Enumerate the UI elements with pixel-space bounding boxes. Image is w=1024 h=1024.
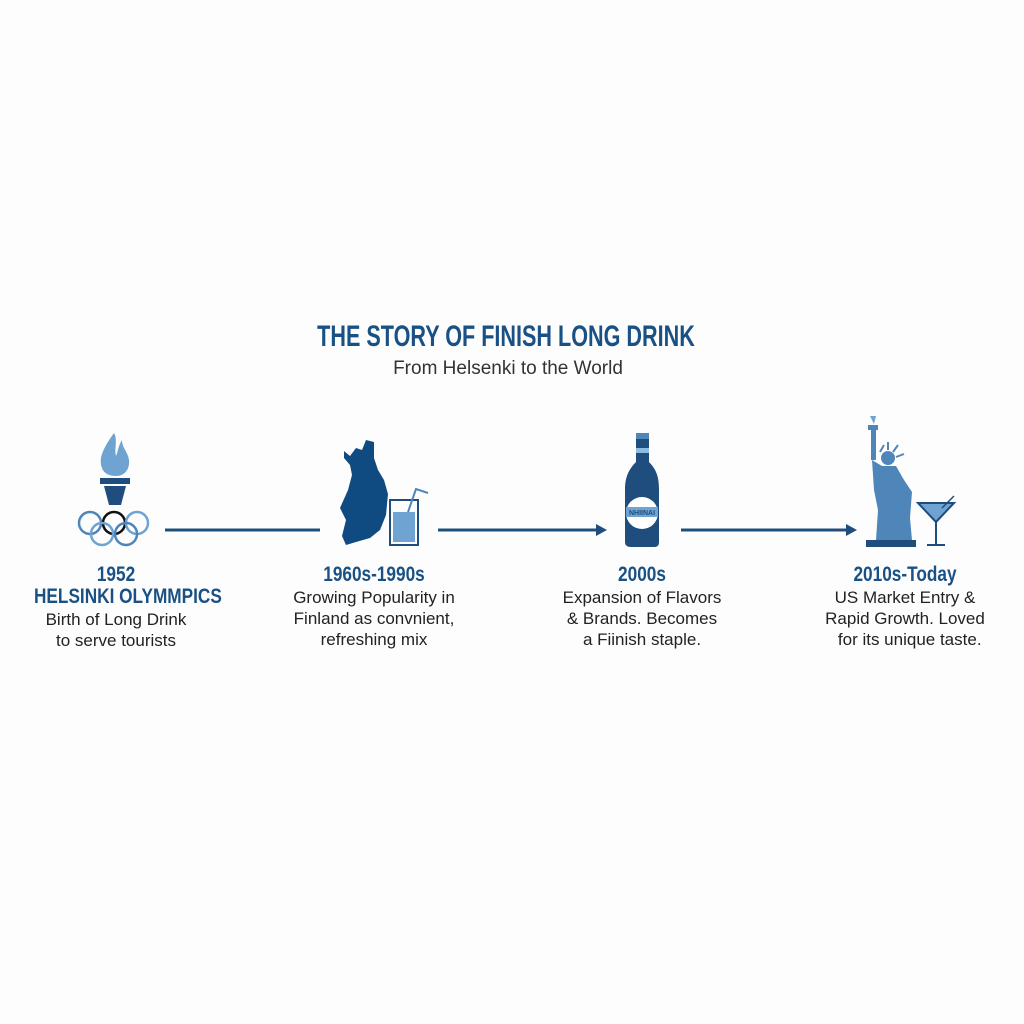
milestone: 1960s-1990s: Finland as convnient,	[294, 609, 454, 628]
milestone: 2000s: a Fiinish staple.	[583, 630, 701, 649]
milestone: 2010s-Today: for its unique taste.	[838, 630, 982, 649]
icon: bottle: NHIINAI	[629, 510, 655, 517]
milestone: 2010s-Today	[825, 563, 985, 649]
icon: bottle	[625, 433, 659, 547]
milestone: 2010s-Today: 2010s-Today	[853, 563, 957, 586]
milestone: 2000s	[563, 563, 721, 649]
milestone: 1960s-1990s: 1960s-1990s	[323, 563, 425, 586]
milestone: 2000s: Expansion of Flavors	[563, 588, 721, 607]
icon: statue of liberty and martini	[866, 416, 954, 547]
milestone: 1960s-1990s: refreshing mix	[321, 630, 427, 649]
milestone: 2010s-Today: Rapid Growth. Loved	[825, 609, 985, 628]
milestone: 1952: 1952	[97, 563, 135, 586]
milestone: 1952: to serve tourists	[56, 631, 176, 650]
milestone: 2000s: & Brands. Becomes	[567, 609, 717, 628]
milestone: 2010s-Today: US Market Entry &	[835, 588, 975, 607]
icon: Finland map and glass	[340, 440, 428, 545]
milestone: 1952: Birth of Long Drink	[46, 610, 186, 629]
milestone: 1952: HELSINKI OLYMMPICS	[34, 585, 222, 608]
subtitle: From Helsenki to the World	[393, 358, 623, 379]
icon: torch and rings	[79, 433, 148, 545]
milestone: 2000s: 2000s	[618, 563, 666, 586]
milestone: 1952	[34, 563, 222, 650]
milestone: 1960s-1990s: Growing Popularity in	[293, 588, 455, 607]
title: THE STORY OF FINISH LONG DRINK	[317, 320, 695, 353]
milestone: 1960s-1990s	[293, 563, 455, 649]
